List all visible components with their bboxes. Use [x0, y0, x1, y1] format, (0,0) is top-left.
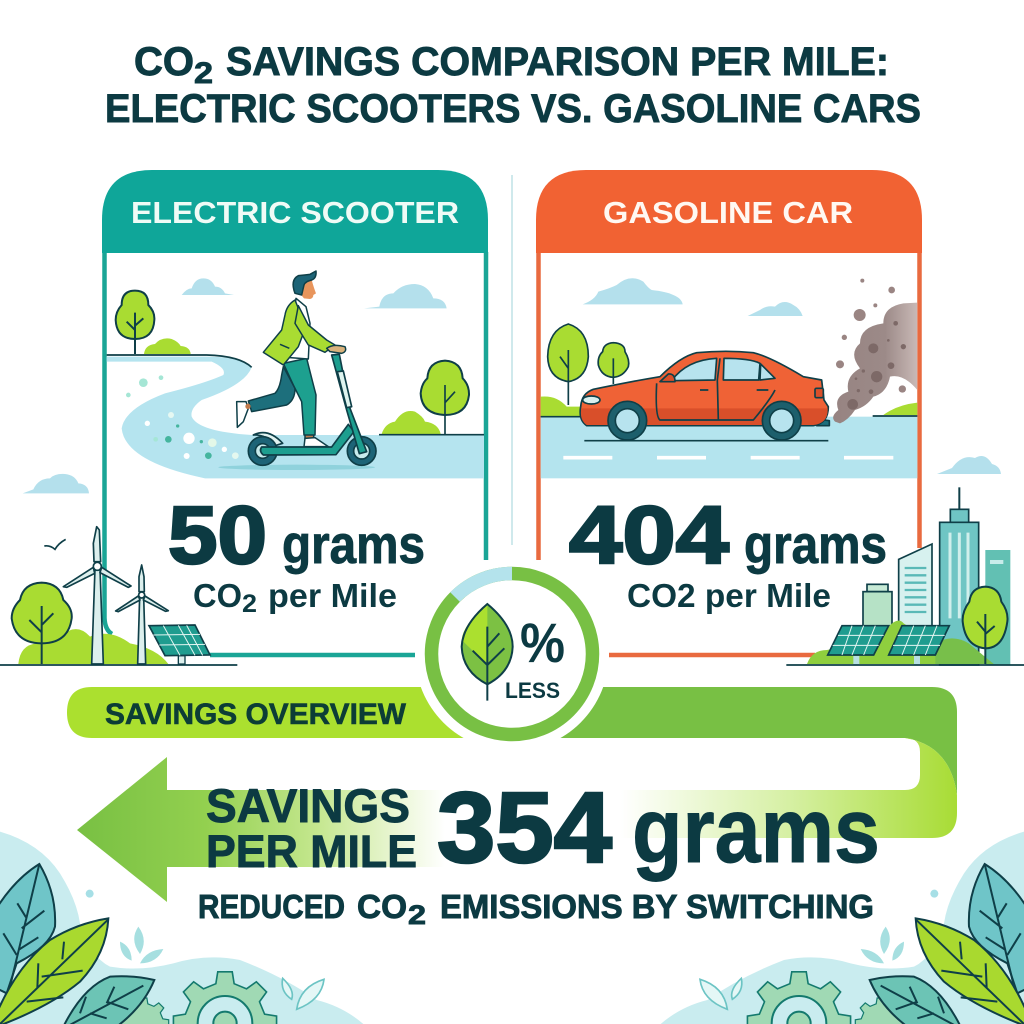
left tree and bush [116, 291, 191, 354]
person [237, 271, 346, 447]
caption [198, 888, 874, 930]
caption: 2 [408, 900, 426, 930]
title: 2 [194, 57, 213, 90]
savings figure: 354 [437, 772, 612, 884]
scooter emission value: grams [282, 515, 425, 575]
person and scooter [237, 271, 376, 465]
car emission value: CO2 per Mile [627, 577, 831, 614]
banner label: SAVINGS OVERVIEW [105, 698, 407, 731]
car [580, 351, 829, 440]
road [541, 417, 917, 478]
car card header [536, 170, 922, 253]
return band [600, 738, 957, 838]
illustration: city skyline and solar panels [786, 487, 1024, 665]
car emission value: grams [744, 515, 887, 575]
badge: percent less [415, 557, 609, 751]
scooter emission value: per Mile [268, 577, 397, 614]
title: ELECTRIC SCOOTERS VS. GASOLINE CARS [105, 87, 921, 131]
caption: CO [357, 888, 407, 925]
illustration: leaves and gears bottom right [661, 832, 1024, 1024]
trees [541, 324, 917, 417]
illustration: small cloud left [23, 474, 89, 493]
scooter emission value: 50 [168, 490, 267, 581]
right tree and bush [379, 361, 484, 435]
savings figure: grams [632, 780, 880, 882]
panel: electric scooter [102, 170, 488, 655]
savings figure: PER MILE [206, 826, 417, 877]
left banner pill [67, 687, 520, 738]
car emission value: 404 [569, 490, 729, 581]
scooter [248, 354, 376, 465]
savings figure [206, 772, 880, 884]
illustration: wind turbines, tree and solar panel [0, 527, 237, 665]
road dashes [563, 452, 893, 463]
bushes [541, 396, 917, 417]
arrow: savings direction [77, 757, 445, 902]
scooter card frame [104, 252, 486, 655]
car card header: GASOLINE CAR [603, 195, 853, 230]
car card frame [538, 252, 920, 655]
title [105, 40, 921, 131]
title: CO [134, 40, 194, 84]
illustration: small cloud right [937, 456, 1001, 474]
clouds [182, 278, 447, 308]
right banner bar [500, 687, 957, 795]
clouds [583, 278, 803, 316]
car scene illustration [541, 278, 917, 478]
energy dots [126, 375, 239, 459]
caption: REDUCED [198, 888, 345, 925]
panel: gasoline car [536, 170, 922, 655]
badge: percent less: % [520, 611, 565, 674]
scooter scene illustration [107, 271, 484, 478]
title: SAVINGS COMPARISON PER MILE: [226, 40, 889, 84]
illustration: leaves and gears bottom left [0, 832, 363, 1024]
scooter card header [102, 170, 488, 253]
car emission value [569, 490, 887, 614]
exhaust smoke [833, 279, 917, 423]
scooter shadow [218, 465, 375, 470]
scooter card header: ELECTRIC SCOOTER [131, 195, 459, 230]
scooter emission value [168, 490, 425, 618]
badge: percent less: LESS [505, 678, 560, 703]
savings figure: SAVINGS [206, 779, 410, 832]
scooter emission value: 2 [242, 590, 257, 618]
scooter emission value: CO [193, 577, 242, 614]
river path [107, 357, 484, 478]
caption: EMISSIONS BY SWITCHING [440, 888, 874, 925]
icon: leaf [462, 604, 513, 701]
banner: savings overview [67, 687, 957, 838]
